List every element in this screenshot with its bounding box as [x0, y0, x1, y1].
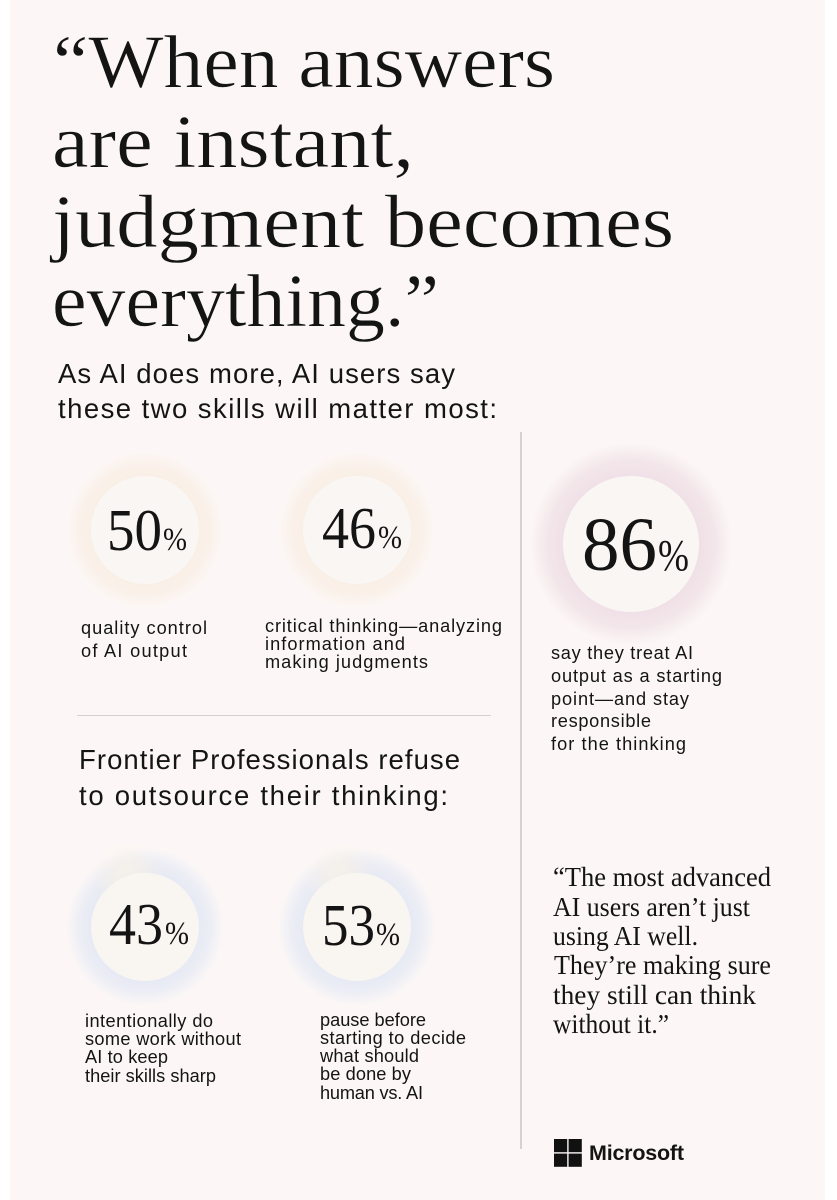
label: 86%: for the thinking	[551, 734, 686, 754]
title: “When answers	[53, 21, 555, 104]
subheading: skills	[58, 358, 497, 424]
label: 43%: AI to keep	[85, 1047, 168, 1067]
quote: AI users aren’t just	[553, 892, 750, 922]
stat: 50%: 50	[107, 497, 162, 563]
label: 43%: intentionally do	[85, 1011, 213, 1031]
label: 53%: pause before	[320, 1010, 426, 1030]
quote: They’re making sure	[554, 950, 771, 980]
label: 86%: say they treat AI	[551, 643, 693, 663]
title: are instant,	[52, 101, 414, 184]
stat: 86%	[529, 442, 733, 646]
stat: 50%: %	[163, 522, 187, 558]
label: 53%	[319, 1010, 466, 1103]
label: 46%: critical thinking—analyzing	[265, 616, 502, 636]
label: 43%: their skills sharp	[85, 1066, 216, 1086]
label: 43%	[85, 1011, 241, 1086]
subheading: frontier professionals: Frontier Professionals refuse	[79, 744, 460, 775]
stat: 86%: %	[658, 531, 689, 580]
stat: 53%	[278, 842, 436, 1006]
label: 86%: responsible	[551, 711, 651, 731]
stat: 46%	[278, 451, 436, 609]
stat: 50%	[66, 451, 224, 609]
stat: 86%: 86	[582, 503, 657, 587]
quote	[553, 862, 771, 1039]
label: 46%: information and	[265, 634, 405, 654]
quote: without it.”	[553, 1009, 669, 1039]
stat: 53%: 53	[322, 892, 375, 958]
subheading: frontier professionals	[79, 744, 460, 811]
label: 50%	[81, 618, 207, 661]
label: 53%: human vs. AI	[320, 1083, 423, 1103]
label: 46%: making judgments	[265, 652, 428, 672]
label: 46%	[265, 616, 502, 672]
stat: 43%	[66, 842, 224, 1006]
stat: 43%: 43	[109, 891, 163, 957]
stat: 46%: %	[378, 520, 402, 556]
quote: using AI well.	[553, 921, 698, 951]
subheading: skills: these two skills will matter most:	[58, 393, 497, 424]
subheading: skills: As AI does more, AI users say	[58, 358, 455, 389]
quote: “The most advanced	[553, 862, 771, 892]
vertical divider	[520, 432, 522, 1149]
Microsoft logo: Microsoft	[589, 1141, 684, 1165]
Microsoft logo	[554, 1139, 684, 1167]
stat: 53%: %	[376, 917, 400, 953]
label: 53%: be done by	[320, 1064, 412, 1084]
stat: 43%: %	[165, 916, 189, 952]
icon: Microsoft squares	[554, 1139, 582, 1167]
label: 53%: what should	[319, 1046, 419, 1066]
quote: they still can think	[553, 980, 756, 1010]
subheading: frontier professionals: to outsource their thinking:	[79, 780, 448, 811]
label: 86%	[551, 643, 722, 754]
label: 53%: starting to decide	[320, 1028, 466, 1048]
title: everything.”	[52, 260, 439, 343]
label: 50%: quality control	[81, 618, 207, 638]
title	[49, 21, 674, 343]
title: judgment becomes	[49, 181, 674, 264]
label: 43%: some work without	[85, 1029, 241, 1049]
label: 50%: of AI output	[81, 641, 187, 661]
stat: 46%: 46	[322, 495, 376, 561]
label: 86%: output as a starting	[551, 666, 722, 686]
label: 86%: point—and stay	[551, 689, 690, 709]
